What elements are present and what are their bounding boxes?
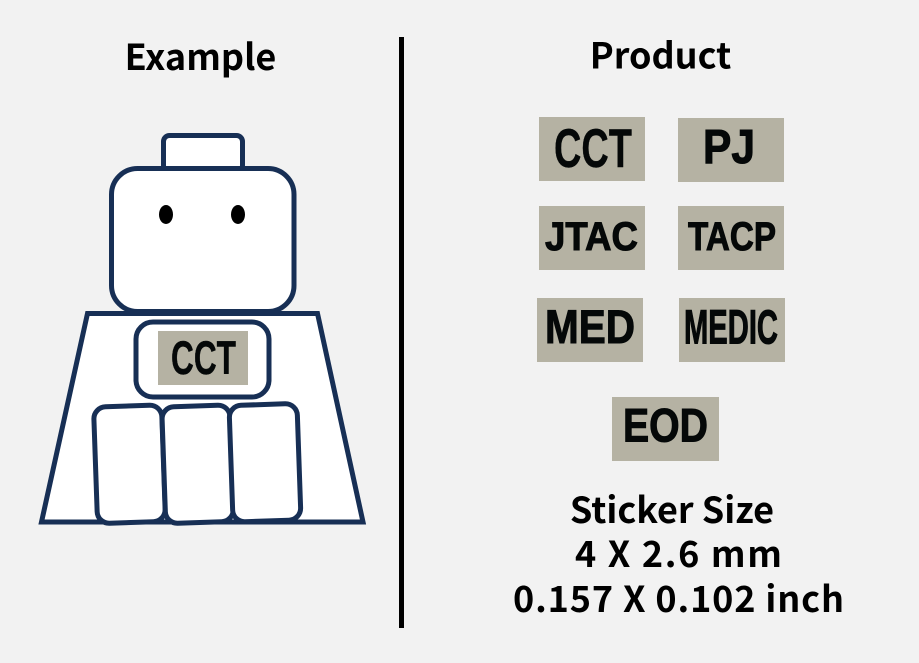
sticker: JTAC: JTAC <box>545 215 638 259</box>
sticker on chest: CCT <box>158 331 248 385</box>
sticker: TACP: TACP <box>688 215 776 259</box>
icon: head stud <box>164 136 242 172</box>
figure: minifigure example <box>42 136 363 524</box>
sticker: PJ <box>678 118 784 182</box>
sticker: TACP <box>678 206 784 270</box>
text: sticker size <box>513 482 844 623</box>
icon: middle pouch <box>162 405 234 524</box>
heading: Product: Product <box>590 28 731 80</box>
divider <box>399 37 404 628</box>
icon: right pouch <box>229 403 301 522</box>
text: sticker size: 0.157 X 0.102 inch <box>513 571 844 623</box>
icon: left pouch <box>93 405 166 524</box>
text: sticker size: 4 X 2.6 mm <box>575 526 782 578</box>
sticker: CCT <box>539 117 645 181</box>
icon: chest panel <box>136 322 269 397</box>
sticker: MED: MED <box>545 300 635 353</box>
sticker: CCT: CCT <box>554 117 632 179</box>
sticker: PJ: PJ <box>703 121 755 174</box>
heading: Example: Example <box>125 29 276 81</box>
icon: left eye <box>159 205 173 224</box>
icon: right eye <box>231 205 245 224</box>
text: sticker size: Sticker Size <box>570 482 774 534</box>
sticker: MEDIC <box>679 298 785 362</box>
icon: head <box>112 168 294 312</box>
sticker: MEDIC: MEDIC <box>684 302 778 354</box>
icon: torso <box>42 314 363 522</box>
sticker: EOD: EOD <box>623 398 708 452</box>
sticker on chest: CCT: CCT <box>171 331 236 384</box>
sticker: JTAC <box>539 206 645 270</box>
